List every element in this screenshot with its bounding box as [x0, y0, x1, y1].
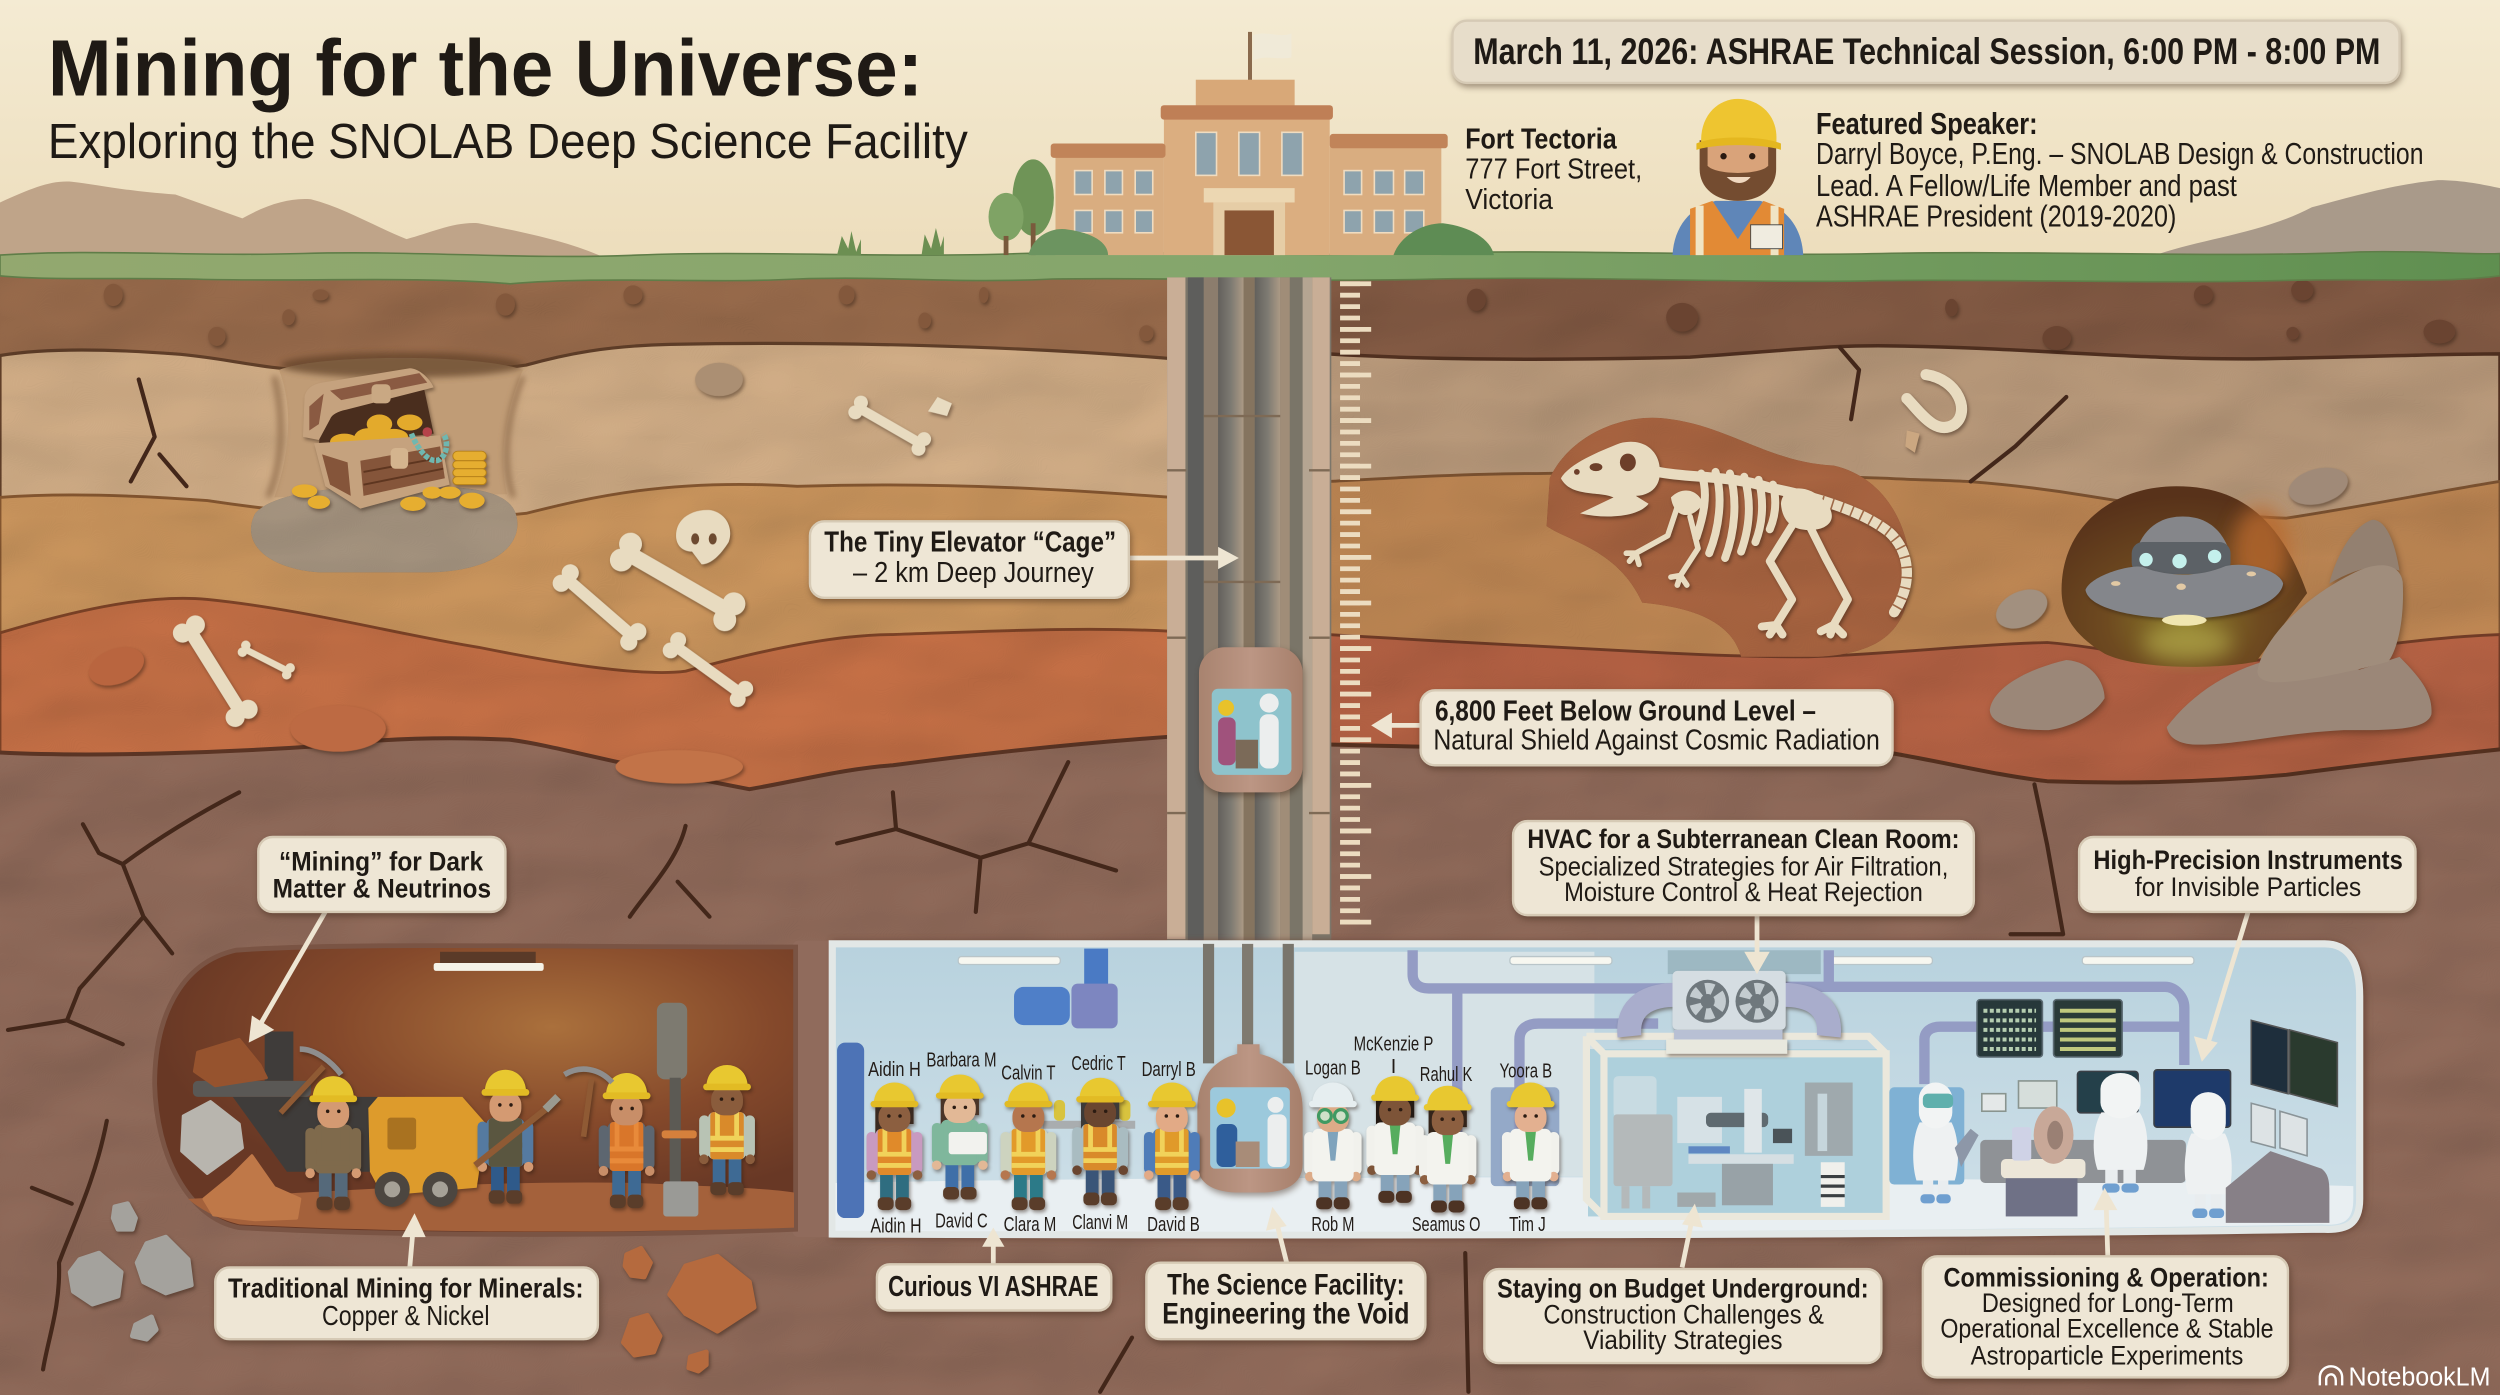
worker: Calvin	[1000, 1083, 1056, 1210]
arrow: to clean room	[1682, 1204, 1703, 1267]
callout: depth	[1421, 690, 1893, 765]
dark equipment	[233, 1032, 405, 1172]
ducts	[1629, 995, 1829, 1036]
portico and door	[1204, 188, 1295, 202]
right strata	[1328, 271, 2500, 1395]
elevator cage	[1199, 647, 1303, 792]
capsule window	[1210, 1087, 1290, 1169]
callout: dark matter	[258, 837, 505, 912]
title: Mining for the Universe:	[48, 24, 923, 113]
wall cabinet	[1491, 1087, 1559, 1186]
subtitle: Exploring the SNOLAB Deep Science Facility	[48, 114, 968, 169]
stones in strata	[83, 363, 2352, 784]
safety vest	[1690, 201, 1784, 255]
loose coins	[292, 484, 485, 511]
left strata	[0, 271, 1172, 1395]
flag	[1249, 32, 1251, 83]
name labels: bottom row: Clara M	[1004, 1214, 1056, 1236]
loose ore rocks	[70, 1204, 754, 1371]
callout: budget	[1484, 1269, 1881, 1363]
name labels: top row: McKenzie P	[1354, 1034, 1433, 1056]
cave lamp	[434, 952, 544, 971]
title	[48, 24, 968, 169]
hard hat	[1701, 99, 1776, 143]
trees and bushes	[837, 159, 1494, 255]
name labels: top row: Logan B	[1305, 1058, 1361, 1080]
right wing	[1330, 147, 1441, 255]
fossil pit	[1547, 418, 1910, 657]
callout: budget: Viability Strategies	[1583, 1324, 1783, 1355]
miner with mallet	[475, 1070, 558, 1204]
grass strip	[0, 252, 2500, 284]
door	[837, 1043, 864, 1218]
arrow: to science facility	[1266, 1207, 1287, 1263]
capsule riders	[1217, 1124, 1237, 1167]
name labels: top row: Aidin H	[868, 1059, 921, 1081]
ceiling lights	[958, 957, 2194, 965]
boulders right	[1990, 520, 2432, 745]
pelvis	[1781, 488, 1832, 530]
name labels: top row	[868, 1034, 1552, 1086]
name labels: top row: Cedric T	[1071, 1053, 1126, 1075]
callout: depth: Natural Shield Against Cosmic Radiation	[1433, 724, 1880, 756]
ufo saucer	[2085, 565, 2283, 619]
callout: instruments	[2079, 837, 2415, 912]
callout: Curious VI ASHRAE: Curious VI ASHRAE	[888, 1271, 1099, 1303]
callout: depth: 6,800 Feet Below Ground Level –	[1435, 696, 1816, 728]
callout: commissioning: Operational Excellence & Stable	[1940, 1313, 2274, 1344]
skull	[1561, 442, 1660, 517]
NotebookLM watermark: NotebookLM	[2349, 1363, 2490, 1391]
cave hollow	[2062, 486, 2307, 667]
callout: budget: Construction Challenges &	[1543, 1298, 1824, 1329]
icon: hook fossil	[1905, 375, 1962, 453]
ribs	[1696, 472, 1775, 558]
featured speaker text: ASHRAE President (2019-2020)	[1816, 200, 2176, 233]
wall between mine and lab	[792, 941, 835, 1237]
ring instrument on table	[2001, 1106, 2085, 1216]
cave: treasure pocket	[268, 352, 523, 497]
miners	[281, 1049, 755, 1210]
callout: elevator: The Tiny Elevator “Cage”	[824, 527, 1116, 559]
main block	[1164, 118, 1330, 255]
pebbles in topsoil	[104, 280, 2455, 350]
elevator capsule in lab	[1197, 1044, 1303, 1193]
callout: HVAC: Specialized Strategies for Air Filtration,	[1539, 850, 1948, 881]
ufo dome	[2136, 517, 2229, 550]
arrow: to instruments	[2194, 912, 2248, 1062]
distant mountains left	[0, 182, 609, 260]
arrow: to elevator	[1129, 547, 1239, 569]
desk	[1980, 1140, 2186, 1183]
name labels: bottom row: Rob M	[1311, 1214, 1354, 1236]
callout: elevator	[810, 521, 1129, 598]
icon: treasure chest	[292, 368, 486, 511]
ore: copper on shelf	[195, 1039, 266, 1086]
ore cart	[368, 1097, 486, 1207]
icon: t-rex fossil skeleton	[1561, 442, 1907, 635]
shoulder	[1671, 490, 1703, 515]
skull fossil	[676, 510, 730, 564]
monitors and side screens	[1982, 1020, 2337, 1156]
chest lid	[303, 368, 434, 440]
arrows	[249, 547, 2248, 1267]
fans	[1686, 980, 1729, 1023]
callout: instruments: High-Precision Instruments	[2093, 844, 2403, 875]
distant mountains right	[2156, 180, 2500, 263]
chest base	[314, 435, 450, 509]
worker: Cedric	[1072, 1078, 1128, 1205]
wall displays	[1977, 1000, 2122, 1057]
arrow: to technician area	[2093, 1188, 2117, 1256]
science lab room	[832, 941, 2366, 1240]
callout: HVAC: HVAC for a Subterranean Clean Room:	[1527, 823, 1960, 854]
top storey	[1196, 80, 1295, 112]
arrow: to dark matter ore	[249, 912, 325, 1043]
lavender pipes	[1413, 950, 2184, 1177]
drill rig	[657, 1003, 698, 1216]
gold pile	[330, 415, 423, 450]
name labels: bottom row: Clanvi M	[1072, 1212, 1128, 1234]
scientist: Yoora	[1502, 1083, 1559, 1209]
ore: nickel	[182, 1102, 242, 1173]
HVAC fan unit	[1629, 971, 1829, 1054]
shelf	[193, 1081, 311, 1097]
name labels: top row: Barbara M	[926, 1050, 996, 1072]
chest interior	[319, 389, 434, 446]
elevator shaft	[1167, 277, 1331, 947]
nickel rocks	[70, 1204, 191, 1339]
lab floor	[835, 1177, 2353, 1232]
building: Fort Tectoria	[1051, 32, 1448, 255]
miner in orange vest	[564, 1069, 654, 1208]
glass frame	[1586, 1036, 1886, 1216]
ASHRAE group figures	[867, 1075, 1559, 1212]
arrow: to depth ruler	[1371, 713, 1421, 738]
name labels: top row: I	[1391, 1056, 1396, 1078]
callout: budget: Staying on Budget Underground:	[1497, 1273, 1869, 1304]
callout: Curious VI ASHRAE	[877, 1264, 1111, 1311]
cave floor	[188, 1182, 794, 1232]
icon: featured speaker figure	[1673, 99, 1803, 255]
bunny-suit technicians	[1913, 1083, 1979, 1203]
callout: science facility: The Science Facility:	[1167, 1269, 1405, 1302]
cracks in rock	[8, 348, 2066, 1392]
depth ruler	[1350, 281, 1356, 925]
worker: Aidin	[867, 1083, 922, 1210]
wall shelf	[1043, 1100, 1135, 1129]
venue text: 777 Fort Street,	[1465, 154, 1642, 186]
callout: dark matter: “Mining” for Dark	[279, 845, 484, 876]
coin stack	[453, 451, 486, 485]
name labels: top row: Calvin T	[1001, 1062, 1055, 1084]
torso	[1673, 201, 1803, 255]
name labels: bottom row: David B	[1147, 1214, 1200, 1236]
event date banner	[1452, 21, 2400, 83]
callout: HVAC: Moisture Control & Heat Rejection	[1564, 876, 1923, 907]
venue text	[1465, 123, 1642, 216]
name labels: bottom row: David C	[935, 1211, 988, 1233]
skull holes	[1574, 454, 1636, 475]
callout: elevator: – 2 km Deep Journey	[853, 557, 1094, 589]
featured speaker text	[1816, 108, 2423, 233]
callout: traditional mining: Traditional Mining for Minerals:	[228, 1273, 584, 1304]
callout: instruments: for Invisible Particles	[2135, 871, 2361, 902]
shaft continuation	[1209, 944, 1288, 1063]
icon: notebook arcs	[2320, 1366, 2342, 1385]
name badge	[1751, 225, 1783, 249]
clean room enclosure	[1586, 1036, 1886, 1216]
windows	[1075, 132, 1424, 233]
callout: commissioning	[1923, 1256, 2288, 1377]
miner with pickaxe	[281, 1049, 361, 1210]
callout: science facility	[1146, 1263, 1425, 1339]
instrument area	[1889, 1000, 2337, 1223]
callout: traditional mining: Copper & Nickel	[322, 1300, 489, 1331]
miner in yellow vest	[699, 1065, 755, 1195]
copper rocks	[623, 1248, 754, 1371]
lighter mid wall	[1295, 952, 1594, 1177]
legs and claws	[1762, 523, 1848, 635]
callout: commissioning: Designed for Long-Term	[1982, 1287, 2234, 1318]
blue pipe assembly	[1084, 949, 1108, 985]
venue text: Fort Tectoria	[1465, 123, 1618, 155]
riders	[1218, 717, 1236, 765]
shaft rails	[1167, 277, 1330, 947]
ufo glow	[2143, 625, 2232, 660]
cage window	[1212, 689, 1291, 775]
scientist: McKenzie	[1366, 1076, 1424, 1203]
callout: commissioning: Astroparticle Experiments	[1971, 1340, 2243, 1371]
callout: dark matter: Matter & Neutrinos	[273, 873, 491, 904]
necklace	[411, 434, 447, 461]
blue cabinet	[1889, 1087, 1964, 1185]
icon: ufo cave	[2062, 486, 2307, 667]
name labels: top row: Yoora B	[1500, 1061, 1552, 1083]
clean room machinery	[1614, 1076, 1853, 1208]
bones left	[169, 393, 952, 731]
name labels: bottom row: Tim J	[1509, 1214, 1546, 1236]
left wing	[1055, 156, 1164, 255]
name labels: top row: Rahul K	[1420, 1064, 1473, 1086]
wall panel behind heads	[1668, 950, 1821, 974]
mine cave	[155, 946, 796, 1234]
callout: science facility: Engineering the Void	[1162, 1297, 1409, 1330]
lid planks	[309, 373, 427, 430]
name labels: top row: Darryl B	[1142, 1059, 1196, 1081]
ore: copper large	[204, 1156, 300, 1220]
stone pedestal	[251, 487, 517, 572]
callout: HVAC	[1513, 821, 1974, 915]
scientist: Rahul	[1419, 1086, 1476, 1212]
arrow: to mine	[402, 1213, 426, 1267]
lab rim shadow	[832, 941, 2366, 1240]
arrow: to HVAC	[1744, 915, 1770, 974]
name labels: bottom row: Aidin H	[871, 1215, 922, 1237]
worker: Darryl	[1144, 1083, 1200, 1210]
background sky	[0, 0, 2500, 281]
console	[2226, 1151, 2329, 1223]
featured speaker text: Featured Speaker:	[1816, 108, 2038, 141]
callout: commissioning: Commissioning & Operation:	[1944, 1262, 2269, 1293]
ufo windows	[2139, 550, 2221, 568]
featured speaker text: Lead. A Fellow/Life Member and past	[1816, 170, 2237, 203]
tail vertebrae	[1802, 496, 1907, 612]
name labels: bottom row: Seamus O	[1412, 1214, 1480, 1236]
scientist: Logan	[1304, 1083, 1362, 1209]
spine and tail	[1658, 472, 1907, 612]
worker: Barbara	[932, 1075, 988, 1200]
callout: traditional mining	[215, 1267, 598, 1339]
venue text: Victoria	[1465, 184, 1553, 216]
head and hair	[1700, 140, 1776, 201]
arrow: to group	[982, 1228, 1004, 1264]
name labels: bottom row	[871, 1211, 1546, 1237]
